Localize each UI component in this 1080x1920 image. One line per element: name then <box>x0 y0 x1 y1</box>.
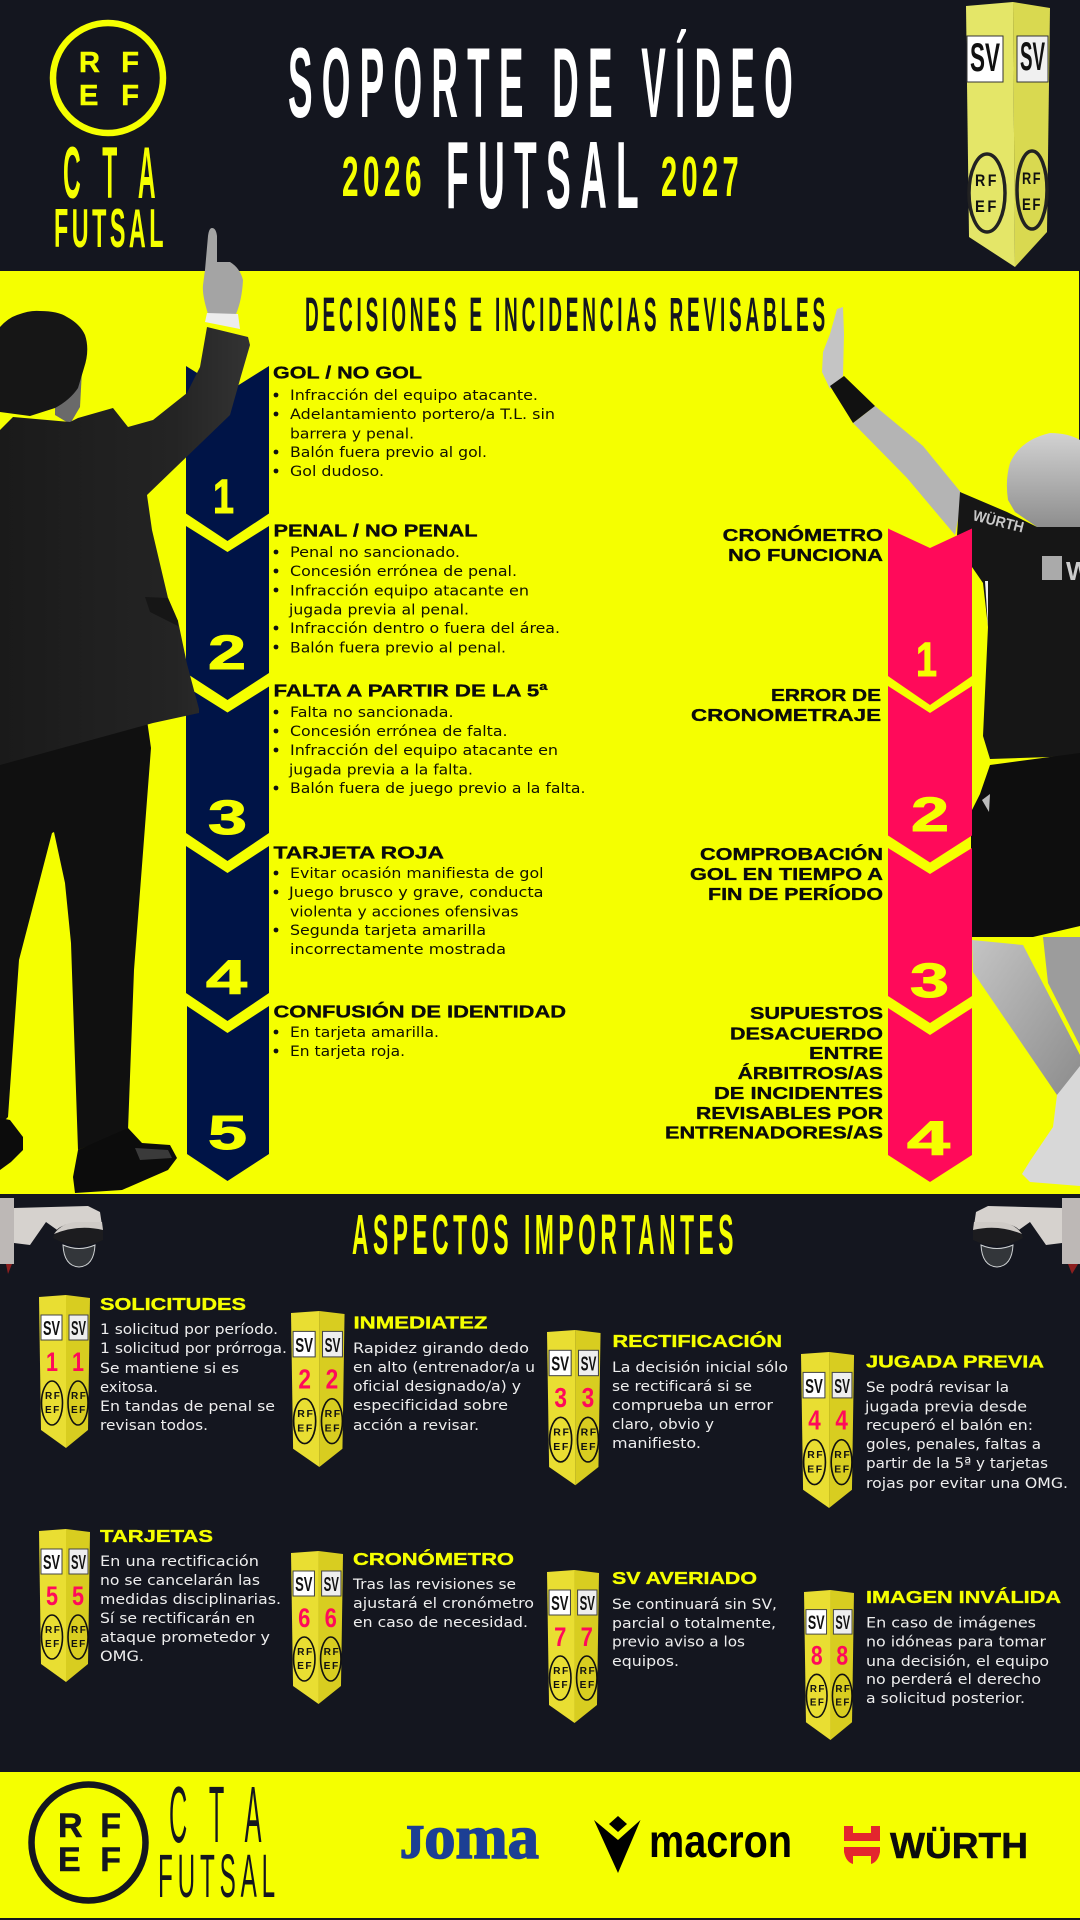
label: cronometro no funciona: NO FUNCIONA <box>728 545 883 565</box>
text block: penal / no penal: jugada previa al penal. <box>288 602 469 618</box>
text block: cronometro: CRONÓMETRO <box>353 1548 514 1569</box>
chart: navy numbered chevrons 1-5: 3 <box>208 792 247 845</box>
icon: pillar 4: EF <box>834 1464 851 1475</box>
icon: pillar 6: EF <box>297 1661 313 1672</box>
panel: yellow decisions section <box>0 271 1080 1194</box>
icon: pillar 7: RF <box>553 1666 570 1677</box>
icon: pillar 1: SV <box>43 1318 60 1340</box>
icon: pillar 1: RF <box>45 1391 61 1402</box>
icon: pillar 8: RF <box>810 1684 826 1695</box>
label: error de cronometraje <box>691 685 881 725</box>
text block: solicitudes: exitosa. <box>100 1379 158 1396</box>
icon: pillar 3: SV <box>581 1353 596 1376</box>
icon: pillar 4 <box>801 1352 854 1508</box>
text block: sv averiado: Se continuará sin SV, <box>612 1596 777 1613</box>
label: cronometro no funciona: CRONÓMETRO <box>723 524 883 545</box>
text block: imagen invalida <box>866 1586 1061 1707</box>
text block: tarjetas: medidas disciplinarias. <box>100 1591 281 1608</box>
icon: pillar 1: RF <box>71 1391 87 1402</box>
label: comprobacion gol en tiempo a fin de periodo <box>690 843 883 904</box>
icon: pillar 6: 6 <box>298 1602 310 1633</box>
text block: gol / no gol: Gol dudoso. <box>290 463 384 480</box>
icon: pillar 4: SV <box>834 1375 850 1398</box>
text block: falta a partir de la 5a <box>274 680 586 797</box>
panel: yellow footer band <box>0 1772 1080 1918</box>
chart: pink numbered chevrons 1-4: 3 <box>910 955 949 1008</box>
text block: solicitudes: 1 solicitud por prórroga. <box>100 1340 287 1357</box>
icon: large video support pillar: RF <box>1022 169 1042 188</box>
text block: rectificacion: RECTIFICACIÓN <box>612 1330 782 1351</box>
chart: pink numbered chevrons 1-4 <box>888 528 972 1182</box>
logo: macron <box>594 1815 792 1873</box>
text block: confusion de identidad: CONFUSIÓN DE IDENTIDAD <box>274 1000 566 1022</box>
text block: confusion de identidad: En tarjeta amarilla. <box>290 1024 439 1041</box>
icon: large video support pillar: EF <box>975 197 999 216</box>
icon: pillar 8: EF <box>810 1698 825 1709</box>
icon: pillar 2: SV <box>295 1334 313 1357</box>
text block: inmediatez: INMEDIATEZ <box>354 1312 488 1332</box>
text block: penal / no penal: PENAL / NO PENAL <box>274 520 478 540</box>
text block: tarjetas: TARJETAS <box>100 1526 213 1546</box>
text block: penal / no penal: Balón fuera previo al penal. <box>290 640 506 656</box>
icon: pillar 3: EF <box>553 1442 570 1453</box>
text block: imagen invalida: una decisión, el equipo <box>866 1653 1049 1670</box>
icon: pillar 3: RF <box>553 1428 570 1439</box>
chart: navy numbered chevrons 1-5 <box>186 366 269 1181</box>
icon: pillar 7: EF <box>580 1680 596 1691</box>
icon: pillar 1: 1 <box>46 1347 58 1377</box>
icon: pillar 1: EF <box>45 1405 61 1416</box>
logo: RFEF CTA Futsal header <box>53 23 167 259</box>
icon: pillar 4: RF <box>807 1450 824 1461</box>
text block: rectificacion: La decisión inicial sólo <box>612 1359 788 1376</box>
icon: pillar 5: RF <box>71 1625 87 1636</box>
label: cronometro no funciona <box>723 524 883 565</box>
icon: pillar 1 <box>39 1295 90 1448</box>
text block: imagen invalida: no idóneas para tomar <box>866 1634 1046 1650</box>
icon: pillar 7: SV <box>580 1593 595 1615</box>
icon: pillar 6: RF <box>324 1647 340 1658</box>
label: supuestos desacuerdo: ENTRENADORES/AS <box>665 1123 883 1143</box>
text block: inmediatez <box>353 1312 535 1434</box>
illustration: referee with raised arm: WÜRTH <box>971 507 1026 536</box>
icon: pillar 5: 5 <box>72 1581 84 1611</box>
chart: navy numbered chevrons 1-5: 2 <box>208 627 246 680</box>
chart: navy numbered chevrons 1-5: 4 <box>206 952 247 1005</box>
logo: RFEF CTA Futsal footer: EF <box>58 1841 121 1879</box>
text block: solicitudes <box>100 1294 287 1434</box>
text block: penal / no penal: Infracción dentro o fuera del área. <box>290 620 560 637</box>
icon: pillar 2: RF <box>297 1409 314 1420</box>
text block: cronometro <box>352 1548 534 1631</box>
text block: gol / no gol <box>273 362 555 480</box>
icon: pillar 7 <box>547 1570 599 1723</box>
text block: inmediatez: Rapidez girando dedo <box>353 1340 529 1357</box>
text: C T A <box>63 133 163 214</box>
text block: solicitudes: 1 solicitud por período. <box>100 1321 278 1338</box>
illustration: referee with raised arm <box>822 307 1080 1186</box>
icon: pillar 8: 8 <box>836 1640 848 1670</box>
text block: sv averiado <box>612 1568 777 1670</box>
text block: solicitudes: Se mantiene si es <box>100 1360 239 1377</box>
icon: pillar 3: SV <box>551 1353 569 1376</box>
label: supuestos desacuerdo: ÁRBITROS/AS <box>738 1062 883 1083</box>
logo: wurth: WÜRTH <box>890 1825 1028 1866</box>
chart: navy numbered chevrons 1-5: 5 <box>208 1107 247 1160</box>
chart: pink numbered chevrons 1-4: 1 <box>916 634 937 687</box>
illustration: person in suit raising finger <box>0 228 250 1193</box>
icon: pillar 5: EF <box>45 1639 61 1650</box>
text block: solicitudes: En tandas de penal se <box>100 1398 275 1415</box>
text block: confusion de identidad: En tarjeta roja. <box>290 1043 405 1060</box>
icon: pillar 2: EF <box>297 1423 314 1434</box>
text block: jugada previa: goles, penales, faltas a <box>866 1436 1041 1453</box>
text block: gol / no gol: barrera y penal. <box>290 426 414 442</box>
text block: penal / no penal: Infracción equipo atacante en <box>290 582 529 600</box>
icon: pillar 6: SV <box>324 1574 339 1596</box>
text block: rectificacion: se rectificará si se <box>612 1378 752 1395</box>
icon: large video support pillar: SV <box>1020 35 1045 79</box>
text block: tarjetas: Sí se rectificarán en <box>100 1610 255 1627</box>
icon: pillar 6: 6 <box>325 1602 337 1633</box>
text block: cronometro: ajustará el cronómetro <box>353 1595 534 1612</box>
text block: rectificacion: claro, obvio y <box>612 1416 714 1433</box>
text block: tarjetas: OMG. <box>100 1648 144 1665</box>
text block: solicitudes: SOLICITUDES <box>100 1294 246 1314</box>
text block: imagen invalida: no perderá el derecho <box>866 1671 1041 1688</box>
text block: tarjeta roja: Evitar ocasión manifiesta de gol <box>290 865 544 882</box>
icon: pillar 1: SV <box>71 1318 86 1340</box>
label: supuestos desacuerdo: SUPUESTOS <box>750 1003 883 1023</box>
title: FUTSAL <box>446 122 648 229</box>
text block: imagen invalida: IMAGEN INVÁLIDA <box>866 1586 1061 1607</box>
label: supuestos desacuerdo: DE INCIDENTES <box>714 1083 883 1103</box>
text block: rectificacion: comprueba un error <box>612 1397 773 1414</box>
icon: pillar 2: SV <box>325 1334 340 1357</box>
text block: tarjeta roja: Segunda tarjeta amarilla <box>290 922 486 939</box>
text: FUTSAL <box>54 197 167 259</box>
text block: jugada previa: jugada previa desde <box>864 1398 1027 1416</box>
icon: pillar 6: EF <box>324 1661 340 1672</box>
text block: sv averiado: parcial o totalmente, <box>612 1615 776 1632</box>
text block: sv averiado: previo aviso a los <box>612 1634 745 1650</box>
text block: tarjetas: ataque prometedor y <box>100 1629 270 1646</box>
text block: cronometro: en caso de necesidad. <box>353 1614 528 1631</box>
text block: jugada previa: JUGADA PREVIA <box>866 1352 1044 1372</box>
icon: pillar 6: SV <box>295 1574 313 1596</box>
text block: inmediatez: oficial designado/a) y <box>353 1378 521 1395</box>
icon: pillar 3: 3 <box>582 1383 594 1413</box>
text block: sv averiado: equipos. <box>612 1653 679 1670</box>
label: comprobacion gol en tiempo a fin de periodo: GOL EN TIEMPO A <box>690 864 883 884</box>
logo: RFEF CTA Futsal footer: RF <box>58 1807 121 1845</box>
label: supuestos desacuerdo: ENTRE <box>809 1043 883 1063</box>
icon: pillar 1: 1 <box>72 1347 84 1377</box>
icon: pillar 3: EF <box>581 1442 597 1453</box>
logo: macron: macron <box>649 1815 792 1867</box>
icon: large video support pillar: EF <box>1022 195 1042 214</box>
label: supuestos desacuerdo: REVISABLES POR <box>696 1103 883 1123</box>
logo: RFEF CTA Futsal header: EF <box>79 80 139 112</box>
icon: pillar 7: 7 <box>581 1621 593 1652</box>
icon: pillar 2 <box>291 1311 345 1467</box>
logo: RFEF CTA Futsal footer <box>32 1770 280 1910</box>
text block: confusion de identidad <box>274 1000 566 1060</box>
text block: imagen invalida: En caso de imágenes <box>866 1614 1036 1632</box>
text block: jugada previa: partir de la 5ª y tarjetas <box>866 1455 1048 1472</box>
icon: pillar 8: SV <box>835 1612 850 1634</box>
text block: cronometro: Tras las revisiones se <box>352 1576 516 1593</box>
icon: pillar 5 <box>39 1529 90 1682</box>
icon: left security camera <box>0 1198 103 1274</box>
icon: pillar 1: EF <box>71 1405 87 1416</box>
icon: pillar 4: 4 <box>808 1405 821 1435</box>
text block: falta a partir de la 5a: Infracción del equipo atacante en <box>290 742 558 759</box>
chart: pink numbered chevrons 1-4: 4 <box>907 1113 950 1166</box>
icon: large video support pillar: SV <box>970 36 1000 80</box>
logo: RFEF CTA Futsal header: RF <box>79 47 139 79</box>
icon: pillar 8: SV <box>808 1612 825 1634</box>
icon: large video support pillar: RF <box>975 171 999 190</box>
text block: falta a partir de la 5a: Falta no sancionada. <box>290 704 454 721</box>
label: comprobacion gol en tiempo a fin de periodo: FIN DE PERÍODO <box>708 883 883 904</box>
text block: tarjeta roja <box>274 842 544 958</box>
text block: jugada previa: Se podrá revisar la <box>866 1379 1009 1396</box>
icon: pillar 8: RF <box>835 1684 851 1695</box>
icon: pillar 5: 5 <box>46 1581 58 1611</box>
icon: pillar 5: EF <box>71 1639 87 1650</box>
title: 2027 <box>661 145 743 209</box>
text block: tarjetas: no se cancelarán las <box>100 1572 260 1589</box>
icon: pillar 7: 7 <box>554 1621 566 1652</box>
icon: pillar 2: 2 <box>298 1364 311 1394</box>
label: supuestos desacuerdo: DESACUERDO <box>730 1023 883 1043</box>
chart: pink numbered chevrons 1-4: 2 <box>911 789 949 842</box>
text block: gol / no gol: Adelantamiento portero/a T.L. sin <box>290 406 555 423</box>
icon: pillar 2: EF <box>325 1423 341 1434</box>
icon: pillar 4: SV <box>805 1375 823 1398</box>
text: FUTSAL <box>158 1842 280 1910</box>
icon: pillar 6: RF <box>297 1647 314 1658</box>
icon: pillar 2: RF <box>325 1409 342 1420</box>
text block: gol / no gol: Balón fuera previo al gol. <box>290 444 487 461</box>
text block: inmediatez: especificidad sobre <box>353 1397 508 1414</box>
icon: pillar 7: RF <box>580 1666 596 1677</box>
text block: penal / no penal <box>274 520 560 656</box>
title <box>288 27 802 229</box>
icon: pillar 2: 2 <box>326 1364 338 1394</box>
text block: jugada previa: recuperó el balón en: <box>866 1417 1033 1434</box>
label: supuestos desacuerdo <box>665 1003 883 1143</box>
icon: pillar 7: SV <box>551 1593 569 1615</box>
text block: inmediatez: en alto (entrenador/a u <box>353 1359 535 1376</box>
text block: rectificacion: manifiesto. <box>612 1435 701 1452</box>
icon: pillar 5: SV <box>71 1552 86 1574</box>
label: error de cronometraje: ERROR DE <box>771 685 881 705</box>
text block: rectificacion <box>612 1330 788 1452</box>
icon: pillar 8: 8 <box>811 1640 823 1670</box>
icon: pillar 7: EF <box>553 1680 569 1691</box>
text block: inmediatez: acción a revisar. <box>353 1417 479 1434</box>
label: comprobacion gol en tiempo a fin de periodo: COMPROBACIÓN <box>700 843 883 864</box>
text block: tarjeta roja: incorrectamente mostrada <box>290 941 506 958</box>
text: C T A <box>169 1770 269 1859</box>
text block: penal / no penal: Penal no sancionado. <box>290 544 460 561</box>
text block: jugada previa <box>864 1352 1068 1492</box>
label: error de cronometraje: CRONOMETRAJE <box>691 705 881 725</box>
text block: tarjetas <box>100 1526 281 1665</box>
text block: gol / no gol: Infracción del equipo atacante. <box>290 387 538 404</box>
text block: solicitudes: revisan todos. <box>100 1417 208 1434</box>
logo: joma: Joma <box>400 1804 539 1872</box>
icon: pillar 3: 3 <box>554 1383 567 1413</box>
text block: tarjeta roja: violenta y acciones ofensivas <box>290 903 518 920</box>
text block: penal / no penal: Concesión errónea de penal. <box>290 563 517 580</box>
icon: right security camera <box>973 1198 1080 1274</box>
text block: gol / no gol: GOL / NO GOL <box>273 362 422 382</box>
chart: navy numbered chevrons 1-5: 1 <box>213 471 234 524</box>
icon: pillar 5: SV <box>43 1552 60 1574</box>
text block: sv averiado: SV AVERIADO <box>612 1568 757 1588</box>
text block: jugada previa: rojas por evitar una OMG. <box>866 1475 1068 1492</box>
text block: tarjetas: En una rectificación <box>100 1553 259 1570</box>
title: 2026 <box>342 145 426 209</box>
icon: large video support pillar <box>966 2 1050 267</box>
icon: pillar 5: RF <box>45 1625 61 1636</box>
text block: tarjeta roja: TARJETA ROJA <box>274 842 444 862</box>
icon: pillar 4: EF <box>807 1464 824 1475</box>
icon: pillar 4: 4 <box>835 1405 848 1435</box>
icon: pillar 8: EF <box>835 1698 851 1709</box>
text block: falta a partir de la 5a: jugada previa a la falta. <box>288 762 473 778</box>
text block: falta a partir de la 5a: FALTA A PARTIR DE LA 5ª <box>274 680 548 700</box>
text block: falta a partir de la 5a: Concesión errónea de falta. <box>290 723 508 740</box>
text block: falta a partir de la 5a: Balón fuera de juego previo a la falta. <box>290 780 586 797</box>
text block: tarjeta roja: Juego brusco y grave, conducta <box>288 884 544 901</box>
icon: pillar 8 <box>804 1590 854 1740</box>
icon: pillar 6 <box>291 1551 343 1704</box>
text block: imagen invalida: a solicitud posterior. <box>866 1690 1025 1707</box>
icon: pillar 4: RF <box>834 1450 851 1461</box>
icon: pillar 3 <box>547 1330 601 1485</box>
icon: pillar 3: RF <box>581 1428 598 1439</box>
